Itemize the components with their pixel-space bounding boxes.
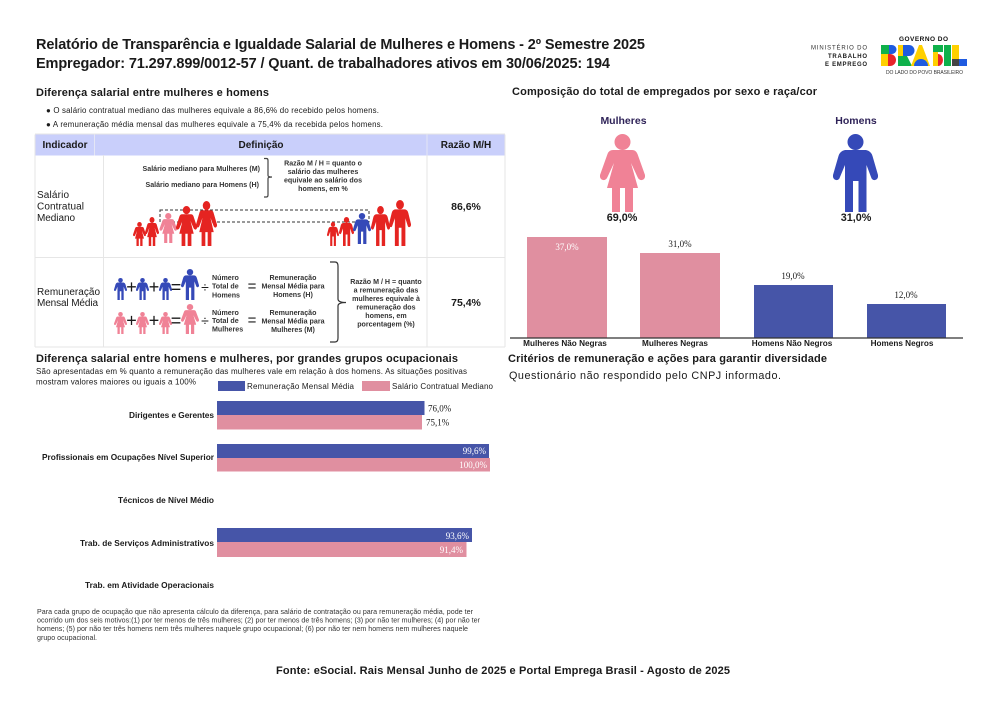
table header [35, 134, 505, 156]
bracket [330, 262, 346, 342]
group: operacionais: Trab. em Atividade Operacionais [85, 580, 214, 590]
group: profissionais: 99,6% [463, 446, 486, 456]
icons: men formula [114, 269, 209, 300]
icons: men formula: = [171, 277, 181, 297]
group: técnicos: Técnicos de Nível Médio [118, 495, 214, 505]
icons: men formula: + [149, 277, 159, 297]
row: remuneração mensal média: Remuneração [270, 274, 317, 282]
title: Empregador: 71.297.899/0012-57 / Quant. de trabalhadores ativos em 30/06/2025: 194 [36, 56, 610, 72]
group: dirigentes e gerentes: Dirigentes e Gerentes [129, 410, 214, 420]
row: remuneração mensal média: remuneração dos [356, 304, 416, 312]
group: dirigentes e gerentes: 75,1% [426, 418, 450, 428]
row: remuneração mensal média: homens, em [365, 312, 407, 320]
row: remuneração mensal média: Número [212, 274, 239, 282]
icon: man [833, 134, 878, 212]
logo: Ministério do Trabalho e Emprego: MINISTÉRIO DO [811, 44, 867, 52]
heading: critérios de remuneração: Critérios de remuneração e ações para garantir diversidade [508, 353, 827, 365]
bracket [264, 158, 272, 197]
row: remuneração mensal média: Mensal Média para [261, 282, 325, 290]
text block: key findings: ● A remuneração média mensal das mulheres equivale a 75,4% da recebida pelos homens. [46, 120, 383, 129]
source: Fonte: eSocial. Rais Mensal Junho de 2025 e Portal Emprega Brasil - Agosto de 2025 [276, 665, 730, 677]
row: salário contratual mediano: Mediano [37, 213, 75, 224]
legend: Salário Contratual Mediano [392, 382, 494, 391]
legend [218, 381, 494, 391]
icons: women group [133, 201, 217, 246]
bar chart: composition by race: Mulheres Não Negras [523, 339, 607, 348]
bar chart: composition by race: Homens Negros [871, 339, 934, 348]
row: remuneração mensal média: Total de [212, 282, 239, 290]
text block: questionário: Questionário não respondido pelo CNPJ informado. [509, 370, 781, 382]
icons: women formula [114, 304, 209, 334]
text block: footnote [37, 608, 481, 642]
row: remuneração mensal média: Remuneração [270, 309, 317, 317]
row: remuneração mensal média: Mensal Média para [261, 318, 325, 326]
panel: women share [600, 115, 647, 224]
group: serviços administrativos [80, 528, 472, 557]
row: salário contratual mediano: Contratual [37, 202, 84, 212]
row: remuneração mensal média: Mulheres [212, 326, 243, 334]
group: profissionais [42, 444, 490, 472]
row: salário contratual mediano: Razão M / H = quanto o [284, 160, 363, 168]
table header: Definição [238, 140, 284, 151]
group: profissionais: Profissionais em Ocupações Nível Superior [42, 452, 215, 462]
group: dirigentes e gerentes [129, 401, 452, 430]
panel: men share: Homens [835, 115, 877, 127]
row: salário contratual mediano: salário das mulheres [288, 168, 358, 176]
logo: Governo do Brasil: GOVERNO DO [899, 36, 948, 43]
group: dirigentes e gerentes: 76,0% [428, 404, 452, 414]
panel: men share: 31,0% [841, 212, 872, 224]
bar chart: composition by race: Mulheres Negras [642, 339, 708, 348]
row: remuneração mensal média: = [248, 312, 257, 329]
heading: diferença por grupos ocupacionais: Diferença salarial entre homens e mulheres, por grandes grupos ocupacionais [36, 353, 458, 365]
row: remuneração mensal média: porcentagem (%) [357, 320, 415, 328]
bar chart: composition by race [510, 237, 963, 348]
text block: footnote: grupo ocupacional. [37, 634, 97, 642]
icons: men formula: + [126, 277, 137, 297]
heading: diferença salarial entre mulheres e homens: Diferença salarial entre mulheres e homens [36, 87, 269, 99]
row: remuneração mensal média: Razão M / H = quanto [350, 278, 422, 286]
row: salário contratual mediano: Salário mediano para Homens (H) [145, 181, 260, 189]
bar chart: composition by race: 19,0% [781, 271, 805, 281]
row: salário contratual mediano [37, 158, 482, 246]
text block: footnote: Para cada grupo de ocupação que não apresenta cálculo da diferença, para salário de contratação ou para remuneração média, pode ter [37, 608, 474, 616]
row: remuneração mensal média: Remuneração [37, 287, 100, 298]
bar chart: composition by race: Homens Não Negros [752, 339, 833, 348]
icons: women formula: + [149, 310, 159, 330]
panel: women share: 69,0% [607, 212, 638, 224]
panel: men share [833, 115, 878, 224]
text block: key findings: ● O salário contratual mediano das mulheres equivale a 86,6% do recebido pelos homens. [46, 106, 379, 115]
logo: Ministério do Trabalho e Emprego [811, 44, 867, 68]
heading: composição do total: Composição do total de empregados por sexo e raça/cor [512, 86, 818, 98]
group: serviços administrativos: Trab. de Serviços Administrativos [80, 538, 214, 548]
row: salário contratual mediano: Salário mediano para Mulheres (M) [143, 165, 261, 173]
row: remuneração mensal média: Total de [212, 317, 239, 325]
icons: men group [327, 200, 411, 246]
bar chart: composition by race: 31,0% [668, 239, 692, 249]
group: profissionais: 100,0% [459, 460, 488, 470]
icons: women formula: + [126, 310, 137, 330]
text block: chart description: São apresentadas em % quanto a remuneração das mulheres vale em relação à dos homens. As situações positivas [36, 367, 467, 376]
row: salário contratual mediano: Salário [37, 190, 69, 201]
dashed comparison box [160, 210, 369, 222]
group: serviços administrativos: 91,4% [440, 545, 464, 555]
bar chart: composition by race: 37,0% [555, 242, 579, 252]
row: remuneração mensal média [37, 262, 482, 342]
row: remuneração mensal média: Mulheres (M) [271, 326, 316, 334]
panel: indicators table [35, 134, 505, 347]
row: remuneração mensal média: Mensal Média [37, 298, 98, 309]
icons: men formula: ÷ [201, 279, 209, 295]
logo: Ministério do Trabalho e Emprego: E EMPREGO [825, 62, 867, 68]
row: remuneração mensal média: = [248, 278, 257, 295]
row: salário contratual mediano: 86,6% [451, 201, 482, 213]
row: remuneração mensal média: a remuneração das [354, 286, 418, 294]
text block: key findings [46, 106, 383, 129]
row: salário contratual mediano: equivale ao salário dos [284, 176, 362, 184]
title [36, 37, 645, 72]
bar chart: occupational groups [42, 401, 490, 590]
text block: chart description [36, 367, 467, 386]
title: Relatório de Transparência e Igualdade Salarial de Mulheres e Homens - 2º Semestre 2025 [36, 37, 645, 53]
icons: women formula: = [171, 310, 181, 330]
row: salário contratual mediano: homens, em % [298, 185, 349, 193]
icon: woman [600, 134, 645, 212]
legend: Remuneração Mensal Média [247, 382, 355, 391]
text block: chart description: mostram valores maiores ou iguais a 100% [36, 378, 196, 386]
table header: Indicador [42, 140, 88, 151]
table header: Razão M/H [441, 140, 491, 151]
logo: Governo do Brasil: DO LADO DO POVO BRASILEIRO [886, 70, 963, 76]
group: serviços administrativos: 93,6% [446, 531, 470, 541]
icons: women formula: ÷ [201, 312, 209, 328]
row: remuneração mensal média: mulheres equivale à [352, 295, 420, 303]
panel: women share: Mulheres [600, 115, 647, 127]
row: remuneração mensal média: Homens (H) [273, 291, 314, 299]
row: remuneração mensal média: Homens [212, 292, 240, 300]
bar chart: composition by race: 12,0% [894, 290, 918, 300]
row: remuneração mensal média: 75,4% [451, 297, 482, 309]
text block: footnote: homens; (5) por não ter três homens nem três mulheres naquele grupo ocupacional; (6) por não ter nem homens nem mulheres naquele [37, 625, 468, 633]
text block: footnote: ocorrido um dos seis motivos:(1) por ter menos de três mulheres; (2) por ter menos de três homens; (3) por não ter mulheres; (4) por não ter [37, 616, 481, 624]
logo: Governo do Brasil [881, 36, 967, 76]
row: remuneração mensal média: Número [212, 309, 239, 317]
logo: Ministério do Trabalho e Emprego: TRABALHO [828, 54, 867, 60]
